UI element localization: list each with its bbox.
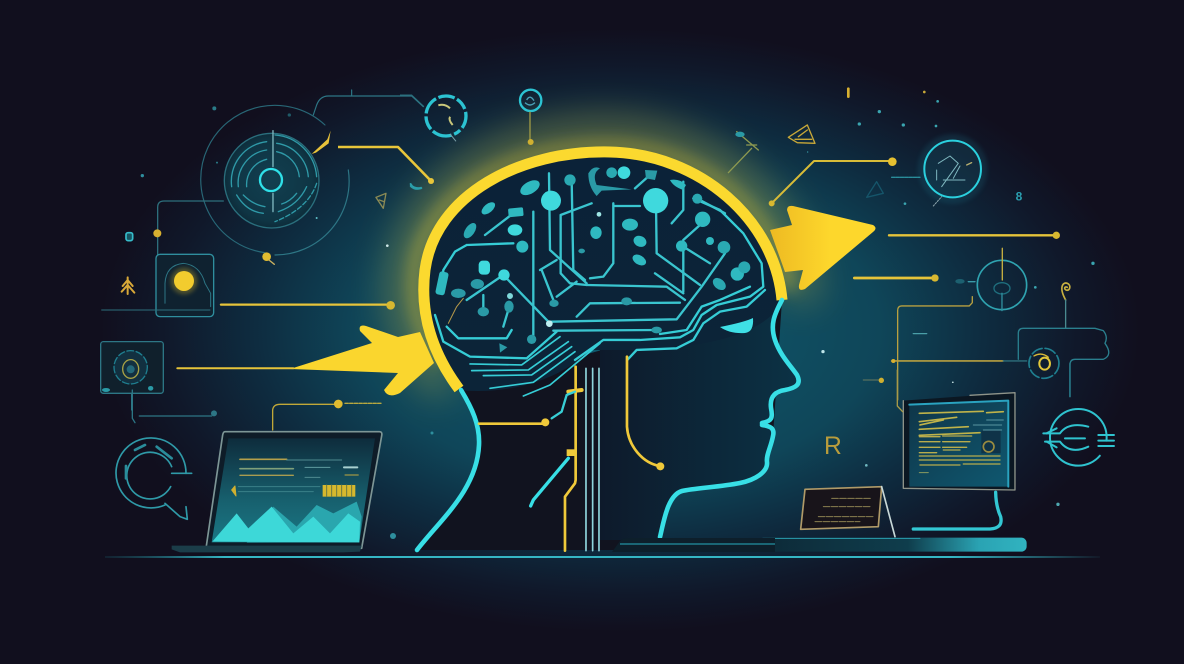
yellow lead into arrow <box>177 365 293 371</box>
base <box>172 546 362 552</box>
brain dome fill <box>424 152 782 391</box>
monitor stand <box>913 492 1001 529</box>
avatar tile <box>102 254 214 317</box>
icon: dashed ring top <box>400 95 466 141</box>
yellow curve with dot <box>627 357 660 466</box>
small marker lead <box>863 378 878 381</box>
eye <box>720 318 753 333</box>
right lower face fill <box>600 300 799 540</box>
right technology cluster <box>728 89 1109 400</box>
nodes <box>435 166 750 353</box>
small tablet <box>801 487 895 537</box>
arrow: outgoing right <box>770 206 876 290</box>
top connectors <box>338 147 434 189</box>
circuit frame <box>1018 328 1109 397</box>
ring target icon <box>955 248 1027 311</box>
laptop connector <box>273 404 338 430</box>
circle compass icon <box>867 134 988 206</box>
big orbit ring <box>201 90 423 255</box>
arrow: incoming left <box>290 326 434 395</box>
yellow bus left <box>565 367 576 551</box>
triangle glyph <box>788 125 815 143</box>
yellow line upper right <box>772 161 890 203</box>
neck and lower head fill <box>417 300 782 550</box>
silver vertical lines <box>586 368 599 551</box>
exclamation <box>844 89 852 97</box>
connector to avatar tile <box>158 201 223 255</box>
spiral glyph <box>1062 283 1070 328</box>
chart mountains back <box>247 502 362 543</box>
scattered dots <box>390 432 434 539</box>
short yellow line <box>854 274 935 282</box>
contour lines <box>435 198 765 396</box>
spiral node <box>1029 348 1059 378</box>
cyan squiggles <box>552 392 575 418</box>
chart mountains front <box>212 507 360 542</box>
yellow polyline top left <box>338 147 433 183</box>
dial ring <box>116 438 192 519</box>
yellow barcode <box>323 485 355 497</box>
head silhouette <box>417 152 799 550</box>
R glyph: R <box>824 433 842 460</box>
desk <box>763 538 1027 552</box>
left technology cluster <box>101 90 423 410</box>
digit and dots: 8 <box>1016 190 1023 204</box>
horizontal yellow connector <box>892 358 1003 363</box>
radar disc <box>224 131 319 228</box>
yellow connector with dot <box>479 420 543 428</box>
face outline <box>660 300 799 537</box>
small glyph below yellow line <box>411 186 421 189</box>
yellow frame line <box>898 297 972 400</box>
yellow line to brain <box>221 301 390 308</box>
wrench glyph <box>728 132 758 173</box>
long yellow line <box>889 232 1055 239</box>
main traces <box>550 253 725 322</box>
screen rows <box>232 459 358 496</box>
head yellow arc <box>424 152 782 389</box>
chip tile <box>101 342 163 393</box>
neck circuitry <box>479 357 664 551</box>
icon: small circle with pin top <box>520 90 541 145</box>
laptop cluster <box>116 390 382 552</box>
floor line <box>105 556 1100 558</box>
yellow glow behind head <box>403 132 805 390</box>
laptop <box>172 432 382 552</box>
€ badge <box>1043 409 1114 466</box>
monitor <box>903 393 1015 529</box>
desk device under head <box>612 538 775 552</box>
monitor cluster <box>763 363 1114 552</box>
small markers <box>122 106 420 294</box>
neck left outline <box>417 390 479 550</box>
connector to dial <box>132 390 212 423</box>
brain circuitry <box>435 166 765 396</box>
yellow spark <box>312 131 331 154</box>
